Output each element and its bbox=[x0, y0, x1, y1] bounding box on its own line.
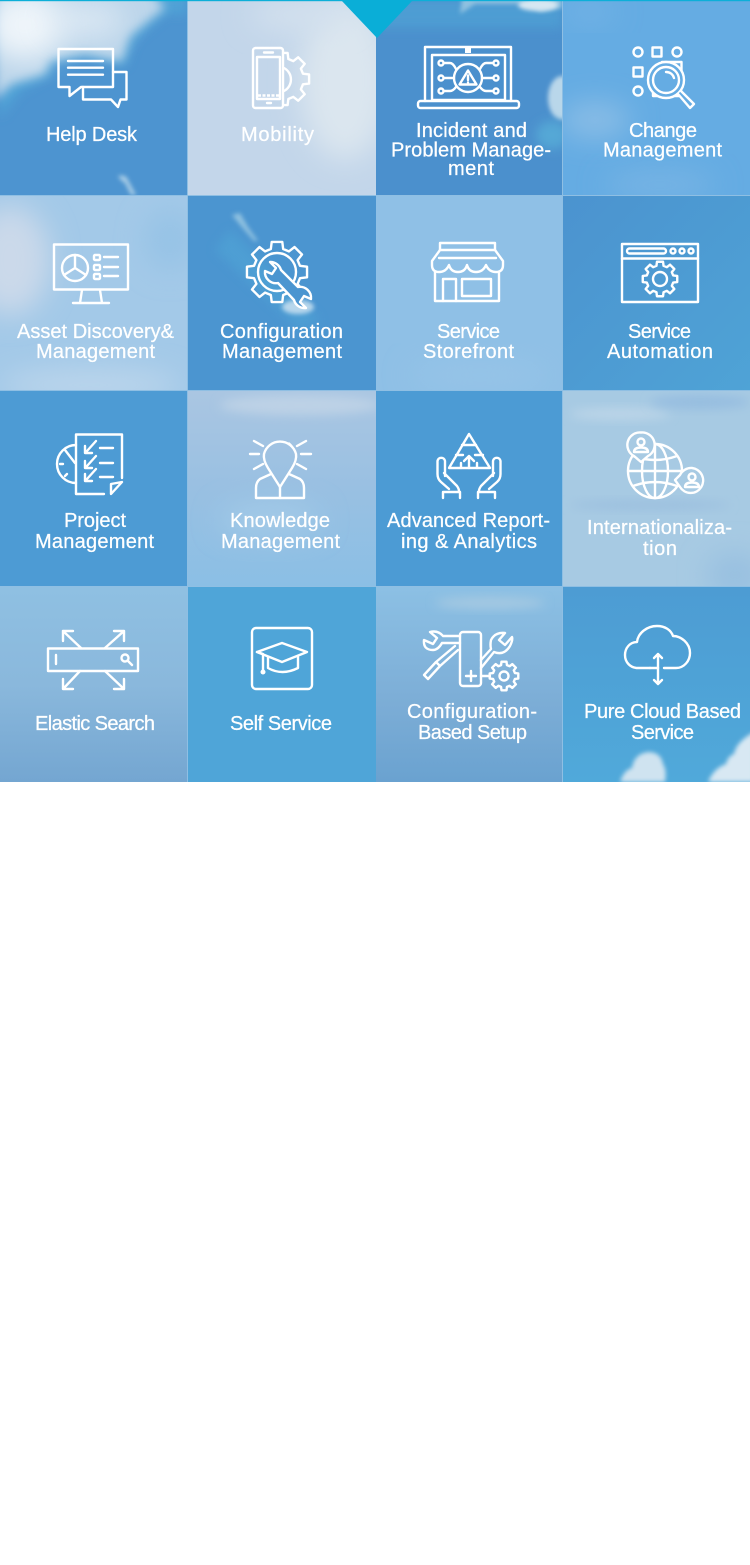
sky background bbox=[376, 596, 562, 782]
label bbox=[607, 321, 713, 363]
sky background bbox=[563, 391, 750, 586]
label: Project bbox=[64, 510, 126, 532]
sky background bbox=[0, 691, 187, 782]
label: Elastic Search bbox=[35, 713, 155, 735]
icon: laptop with alert circuit bbox=[418, 47, 519, 108]
label: Change bbox=[629, 120, 697, 142]
icon: checklist with clock bbox=[57, 434, 122, 494]
panel: Self Service bbox=[188, 587, 376, 782]
panel: Mobility bbox=[188, 0, 390, 195]
icon: phone with gear bbox=[253, 48, 309, 108]
sky background bbox=[376, 391, 562, 586]
icon: graduation cap bbox=[252, 628, 312, 689]
label: Management bbox=[222, 341, 342, 363]
label: Management bbox=[35, 531, 154, 553]
label: Asset Discovery& bbox=[17, 321, 175, 343]
panel: Asset Discovery & Management bbox=[0, 196, 195, 401]
panel: Help Desk bbox=[0, 0, 187, 195]
sky background with wisp bbox=[188, 196, 376, 390]
panel: Pure Cloud Based Service bbox=[563, 587, 750, 782]
icon: cloud with arrows bbox=[625, 626, 690, 684]
sky background with clouds bbox=[376, 1, 562, 195]
panel: Configuration Management bbox=[188, 196, 376, 390]
label bbox=[587, 517, 732, 560]
label bbox=[603, 120, 722, 162]
label: Service bbox=[631, 722, 694, 744]
sky background bbox=[376, 196, 562, 390]
panel: Knowledge Management bbox=[188, 391, 380, 586]
label: Service bbox=[628, 321, 691, 343]
label: Configuration- bbox=[407, 701, 537, 723]
label bbox=[17, 321, 175, 363]
panel: Configuration-Based Setup bbox=[376, 587, 562, 782]
icon: gear with wrench bbox=[247, 242, 311, 308]
panel: Incident and Problem Management bbox=[376, 0, 576, 195]
sky background bbox=[563, 1, 750, 195]
label bbox=[221, 510, 340, 553]
label: Help Desk bbox=[46, 124, 138, 146]
icon: hands holding pyramid bbox=[438, 434, 500, 498]
icon: person with lightbulb head bbox=[250, 441, 311, 498]
panel: Elastic Search bbox=[0, 587, 187, 782]
top stripe bbox=[0, 0, 750, 1]
label: Management bbox=[603, 140, 722, 162]
panel: Project Management bbox=[0, 391, 187, 586]
icon: monitor with pie chart bbox=[54, 244, 128, 303]
sky background bbox=[0, 196, 187, 390]
label bbox=[423, 321, 514, 363]
label bbox=[35, 510, 154, 553]
label bbox=[387, 510, 550, 553]
icon: tools and gear bbox=[424, 632, 518, 690]
icon: magnifier with shapes bbox=[634, 48, 694, 108]
label: Knowledge bbox=[230, 510, 330, 532]
sky background bbox=[188, 1, 376, 195]
top center triangle notch bbox=[341, 0, 413, 38]
sky background bbox=[563, 196, 750, 390]
sky background bbox=[188, 587, 376, 782]
sky background bbox=[188, 391, 376, 544]
label bbox=[391, 120, 551, 180]
label: Configuration bbox=[220, 321, 343, 343]
label: Management bbox=[221, 531, 340, 553]
icon: storefront bbox=[432, 243, 503, 301]
label: Service bbox=[437, 321, 500, 343]
label bbox=[407, 701, 537, 744]
label: Advanced Report- bbox=[387, 510, 550, 532]
panel: Service Automation bbox=[563, 196, 750, 390]
icon: speech bubbles bbox=[58, 49, 126, 107]
label: Based Setup bbox=[418, 722, 527, 744]
label: Incident and bbox=[416, 120, 527, 142]
label: Automation bbox=[607, 341, 713, 363]
label: Internationaliza- bbox=[587, 517, 732, 539]
sky background with clouds bbox=[563, 587, 750, 782]
label: Management bbox=[36, 341, 155, 363]
label: ment bbox=[448, 158, 494, 180]
icon: globe with people bbox=[627, 432, 703, 498]
icon: search bar with arrows bbox=[48, 631, 138, 689]
label: ing & Analytics bbox=[401, 531, 537, 553]
icon: browser window with gear bbox=[622, 244, 698, 302]
panel: Internationalization bbox=[563, 391, 750, 597]
panel: Advanced Reporting & Analytics bbox=[376, 391, 562, 586]
label: Storefront bbox=[423, 341, 514, 363]
label bbox=[220, 321, 343, 363]
sky background bbox=[0, 391, 187, 586]
panel: Change Management bbox=[560, 0, 750, 197]
label: Problem Manage- bbox=[391, 140, 551, 162]
label bbox=[584, 701, 741, 744]
label: Self Service bbox=[230, 713, 332, 735]
label: Mobility bbox=[241, 124, 314, 146]
label: tion bbox=[643, 538, 677, 560]
label: Pure Cloud Based bbox=[584, 701, 741, 723]
panel: Service Storefront bbox=[376, 196, 562, 390]
sky background with cloud bbox=[0, 1, 187, 195]
